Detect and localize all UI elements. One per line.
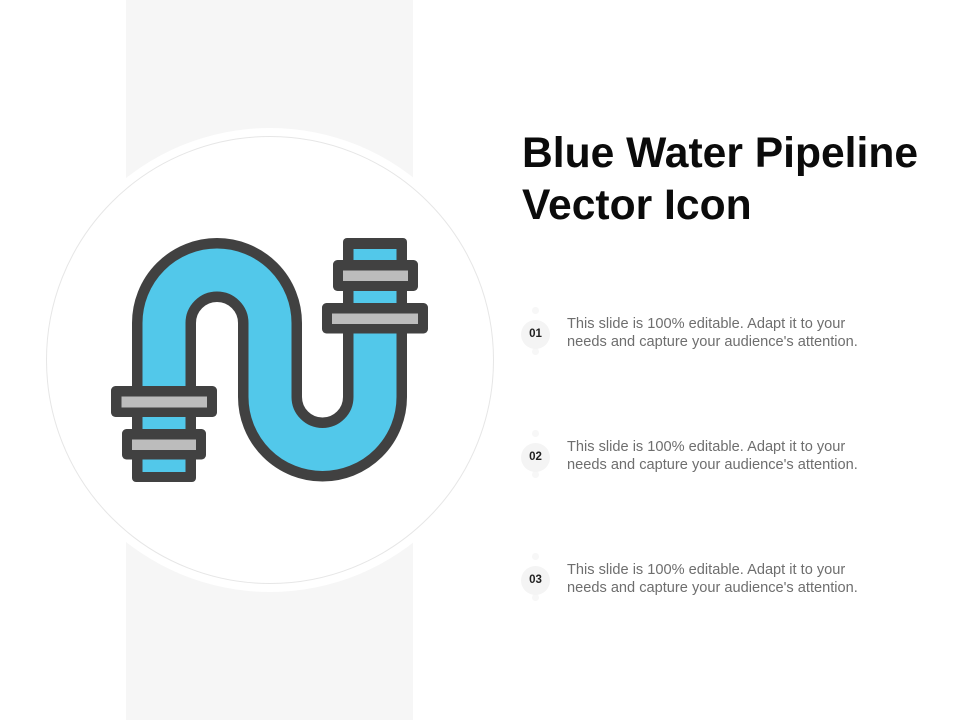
title: Blue Water Pipeline [522,129,918,177]
item 02: needs and capture your audience's attention. [567,457,858,473]
item 01: 01 [529,328,542,340]
item 01 [521,316,858,350]
background band [126,0,413,720]
item 02: 02 [529,451,542,463]
title [522,129,918,229]
item 02 [521,439,858,473]
item 02: This slide is 100% editable. Adapt it to your [567,439,845,455]
item 03 [521,562,858,596]
item 01: needs and capture your audience's attention. [567,334,858,350]
item 03: 03 [529,574,542,586]
title: Vector Icon [522,181,752,229]
item 03: needs and capture your audience's attention. [567,580,858,596]
item 03: This slide is 100% editable. Adapt it to your [567,562,845,578]
item 01: This slide is 100% editable. Adapt it to your [567,316,845,332]
icon: water pipeline [111,238,428,482]
